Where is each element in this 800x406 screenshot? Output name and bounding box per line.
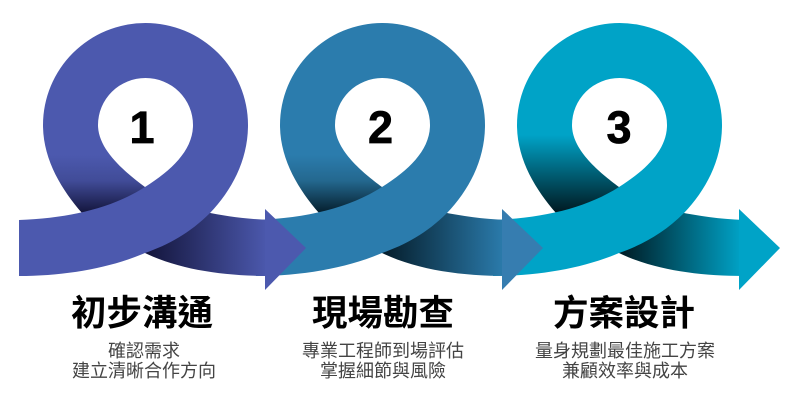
spiral 1	[19, 23, 306, 290]
spiral 2	[256, 23, 543, 290]
step 2 description	[302, 341, 464, 381]
step 3 description: 兼顧效率與成本	[562, 361, 688, 381]
spiral 3	[493, 23, 780, 290]
step 1 heading: 初步溝通	[71, 293, 213, 333]
number 3: 3	[606, 102, 632, 153]
step 3 heading: 方案設計	[553, 293, 695, 333]
step 2 description: 掌握細節與風險	[320, 361, 446, 381]
step 2 heading: 現場勘查	[312, 293, 454, 333]
step 1 description	[72, 341, 216, 381]
step 2 description: 專業工程師到場評估	[302, 341, 464, 361]
step 3 description	[535, 341, 715, 381]
step 3 description: 量身規劃最佳施工方案	[535, 341, 715, 361]
step 1 description: 建立清晰合作方向	[72, 361, 216, 381]
number 1: 1	[129, 102, 155, 153]
step 1 description: 確認需求	[108, 341, 180, 361]
number 2: 2	[368, 102, 393, 153]
